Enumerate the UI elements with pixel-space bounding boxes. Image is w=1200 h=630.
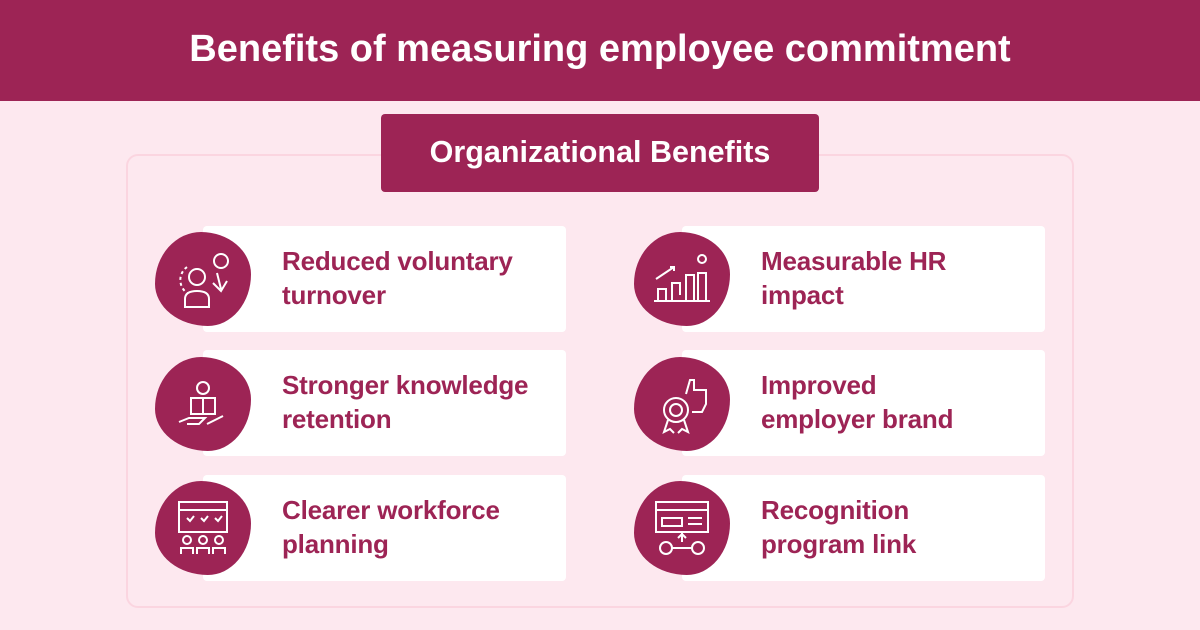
card: reduced voluntary turnover: turnover — [282, 280, 386, 310]
icon: turnover — [155, 232, 251, 326]
subtitle — [381, 114, 819, 192]
icon: HR impact — [634, 232, 730, 326]
card: clearer workforce planning: planning — [282, 529, 389, 559]
card: improved employer brand: employer brand — [761, 404, 953, 434]
icon: recognition — [634, 481, 730, 575]
card: improved employer brand: Improved — [761, 370, 876, 400]
icon: knowledge — [155, 357, 251, 451]
card: recognition program link: program link — [761, 529, 916, 559]
title — [0, 0, 1200, 101]
card: improved employer brand — [682, 350, 1045, 456]
card: measurable HR impact: impact — [761, 280, 844, 310]
icon: employer brand — [634, 357, 730, 451]
card: clearer workforce planning — [203, 475, 566, 581]
card: reduced voluntary turnover — [203, 226, 566, 332]
card: stronger knowledge retention: retention — [282, 404, 391, 434]
card: stronger knowledge retention: Stronger knowledge — [282, 370, 528, 400]
card: recognition program link: Recognition — [761, 495, 909, 525]
card: stronger knowledge retention — [203, 350, 566, 456]
card: clearer workforce planning: Clearer workforce — [282, 495, 500, 525]
panel: organizational benefits — [126, 154, 1074, 608]
card: reduced voluntary turnover: Reduced voluntary — [282, 246, 513, 276]
title: Benefits of measuring employee commitment — [189, 28, 1011, 70]
card: measurable HR impact: Measurable HR — [761, 246, 946, 276]
icon: planning — [155, 481, 251, 575]
card: recognition program link — [682, 475, 1045, 581]
card: measurable HR impact — [682, 226, 1045, 332]
subtitle: Organizational Benefits — [430, 135, 770, 169]
